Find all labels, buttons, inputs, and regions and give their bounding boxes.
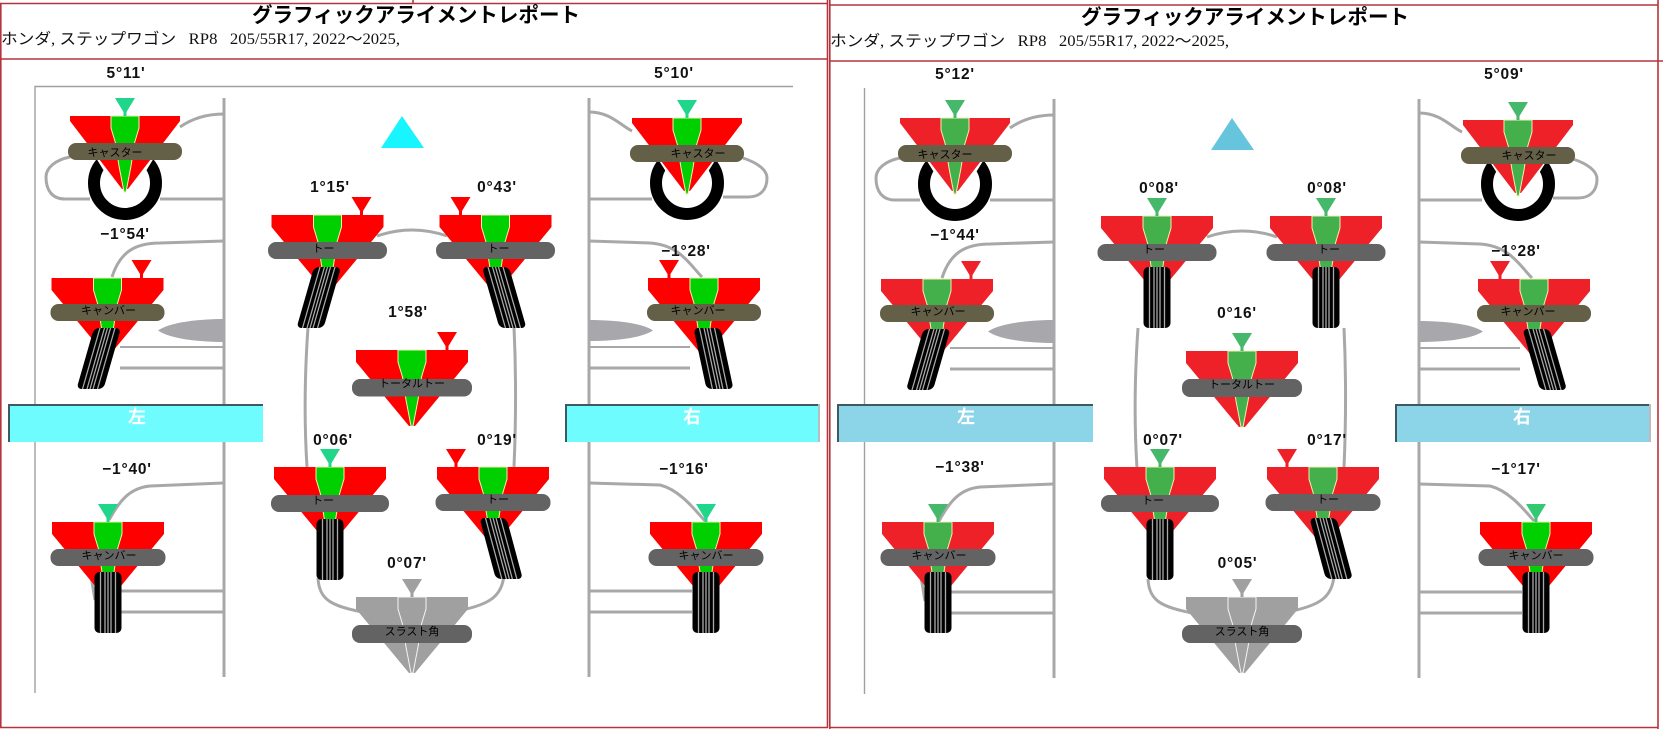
- gauge: left caster: [898, 100, 1012, 215]
- gauge: left caster: キャスター: [918, 148, 972, 161]
- panel: left report: [0, 0, 828, 728]
- car outline: [865, 1, 1597, 678]
- right side banner: [565, 404, 819, 442]
- gauge: front left toe: トー: [312, 243, 334, 255]
- value: left front camber: −1°54': [100, 226, 150, 243]
- value: right caster: 5°09': [1484, 66, 1524, 83]
- gauge: thrust angle: [352, 579, 472, 673]
- gauge: right front camber: [1477, 261, 1591, 390]
- gauge: rear left toe: トー: [1142, 495, 1164, 507]
- gauge: front left toe: トー: [1143, 244, 1165, 256]
- axis lines: [35, 86, 793, 693]
- panel frame: [829, 0, 1663, 729]
- gauge: left front camber: キャンバー: [81, 304, 136, 317]
- gauge: rear left toe: [1101, 449, 1219, 580]
- gauge: rear left toe: トー: [312, 495, 334, 507]
- gauge: front left toe: [1098, 198, 1216, 328]
- gauge: rear right toe: トー: [1317, 494, 1339, 506]
- gauge: rear right toe: トー: [487, 494, 509, 506]
- gauge: thrust angle: [1182, 579, 1302, 673]
- right side banner: [1395, 404, 1650, 442]
- value: rear left toe: 0°07': [1143, 432, 1183, 449]
- title: グラフィックアライメントレポート: [252, 3, 580, 27]
- gauge: left front camber: キャンバー: [910, 305, 966, 318]
- gauge: right front camber: [647, 260, 761, 389]
- gauge: rear left toe: [271, 449, 389, 580]
- gauge: front right toe: トー: [1318, 244, 1340, 256]
- gauge: front right toe: トー: [488, 243, 510, 255]
- gauge: left front camber: [880, 261, 994, 390]
- left side banner: [8, 404, 263, 442]
- value: left rear camber: −1°38': [935, 459, 985, 476]
- value: right front camber: −1°28': [661, 243, 711, 260]
- gauge: front right toe: [1266, 198, 1386, 328]
- vehicle information: ホンダ, ステップワゴン RP8 205/55R17, 2022～2025,: [830, 31, 1229, 50]
- gauge: rear right toe: [1266, 449, 1380, 579]
- left side banner: 左: [128, 407, 146, 427]
- right side banner: 右: [683, 407, 701, 427]
- panel: right report: [829, 0, 1663, 729]
- gauge: right front camber: キャンバー: [1500, 305, 1556, 318]
- value: front left toe: 1°15': [310, 179, 350, 196]
- value: front left toe: 0°08': [1139, 180, 1179, 197]
- vehicle information: ホンダ, ステップワゴン RP8 205/55R17, 2022～2025,: [1, 29, 400, 48]
- value: thrust angle: 0°07': [387, 555, 427, 572]
- gauge: right rear camber: [1478, 504, 1594, 633]
- gauge: right caster: [630, 100, 744, 214]
- value: right front camber: −1°28': [1491, 243, 1541, 260]
- gauge: left rear camber: [880, 504, 996, 633]
- gauge: total toe: トータルトー: [1209, 378, 1275, 391]
- gauge: right rear camber: キャンバー: [678, 549, 734, 562]
- value: rear right toe: 0°19': [477, 432, 517, 449]
- gauge: right front camber: キャンバー: [670, 304, 726, 317]
- gauge: left caster: [68, 98, 182, 214]
- value: left caster: 5°11': [107, 65, 145, 82]
- value: right rear camber: −1°17': [1491, 461, 1541, 478]
- gauge: front right toe: [436, 197, 555, 328]
- value: front right toe: 0°08': [1307, 180, 1347, 197]
- gauge: rear right toe: [436, 449, 550, 579]
- gauge: left rear camber: [50, 504, 166, 633]
- value: front right toe: 0°43': [477, 179, 517, 196]
- gauge: right rear camber: キャンバー: [1508, 549, 1564, 562]
- icon: front direction triangle: [381, 116, 424, 148]
- value: left front camber: −1°44': [930, 227, 980, 244]
- value: rear right toe: 0°17': [1307, 432, 1347, 449]
- right side banner: 右: [1513, 407, 1531, 427]
- value: total toe: 1°58': [388, 304, 428, 321]
- gauge: left caster: キャスター: [88, 146, 142, 159]
- gauge: front left toe: [268, 197, 387, 328]
- panel frame: [0, 0, 828, 728]
- gauge: total toe: トータルトー: [379, 377, 445, 390]
- gauge: thrust angle: スラスト角: [1215, 625, 1269, 638]
- value: left rear camber: −1°40': [102, 461, 152, 478]
- gauge: right caster: キャスター: [1502, 149, 1556, 162]
- title: グラフィックアライメントレポート: [1081, 5, 1409, 29]
- value: rear left toe: 0°06': [313, 432, 353, 449]
- left side banner: [837, 404, 1093, 442]
- car outline: [35, 0, 767, 677]
- value: right rear camber: −1°16': [659, 461, 709, 478]
- gauge: right caster: キャスター: [670, 147, 726, 160]
- gauge: left front camber: [50, 260, 164, 389]
- gauge: left rear camber: キャンバー: [82, 549, 136, 562]
- gauge: left rear camber: キャンバー: [912, 549, 966, 562]
- gauge: right caster: [1461, 102, 1575, 215]
- value: total toe: 0°16': [1217, 305, 1257, 322]
- left side banner: 左: [957, 407, 975, 427]
- value: right caster: 5°10': [654, 65, 694, 82]
- gauge: right rear camber: [648, 504, 764, 633]
- gauge: total toe: [1182, 333, 1302, 427]
- icon: front direction triangle: [1211, 118, 1254, 150]
- gauge: total toe: [352, 332, 472, 426]
- axis line: [864, 88, 866, 694]
- gauge: thrust angle: スラスト角: [385, 625, 439, 638]
- value: left caster: 5°12': [935, 66, 975, 83]
- value: thrust angle: 0°05': [1218, 555, 1257, 572]
